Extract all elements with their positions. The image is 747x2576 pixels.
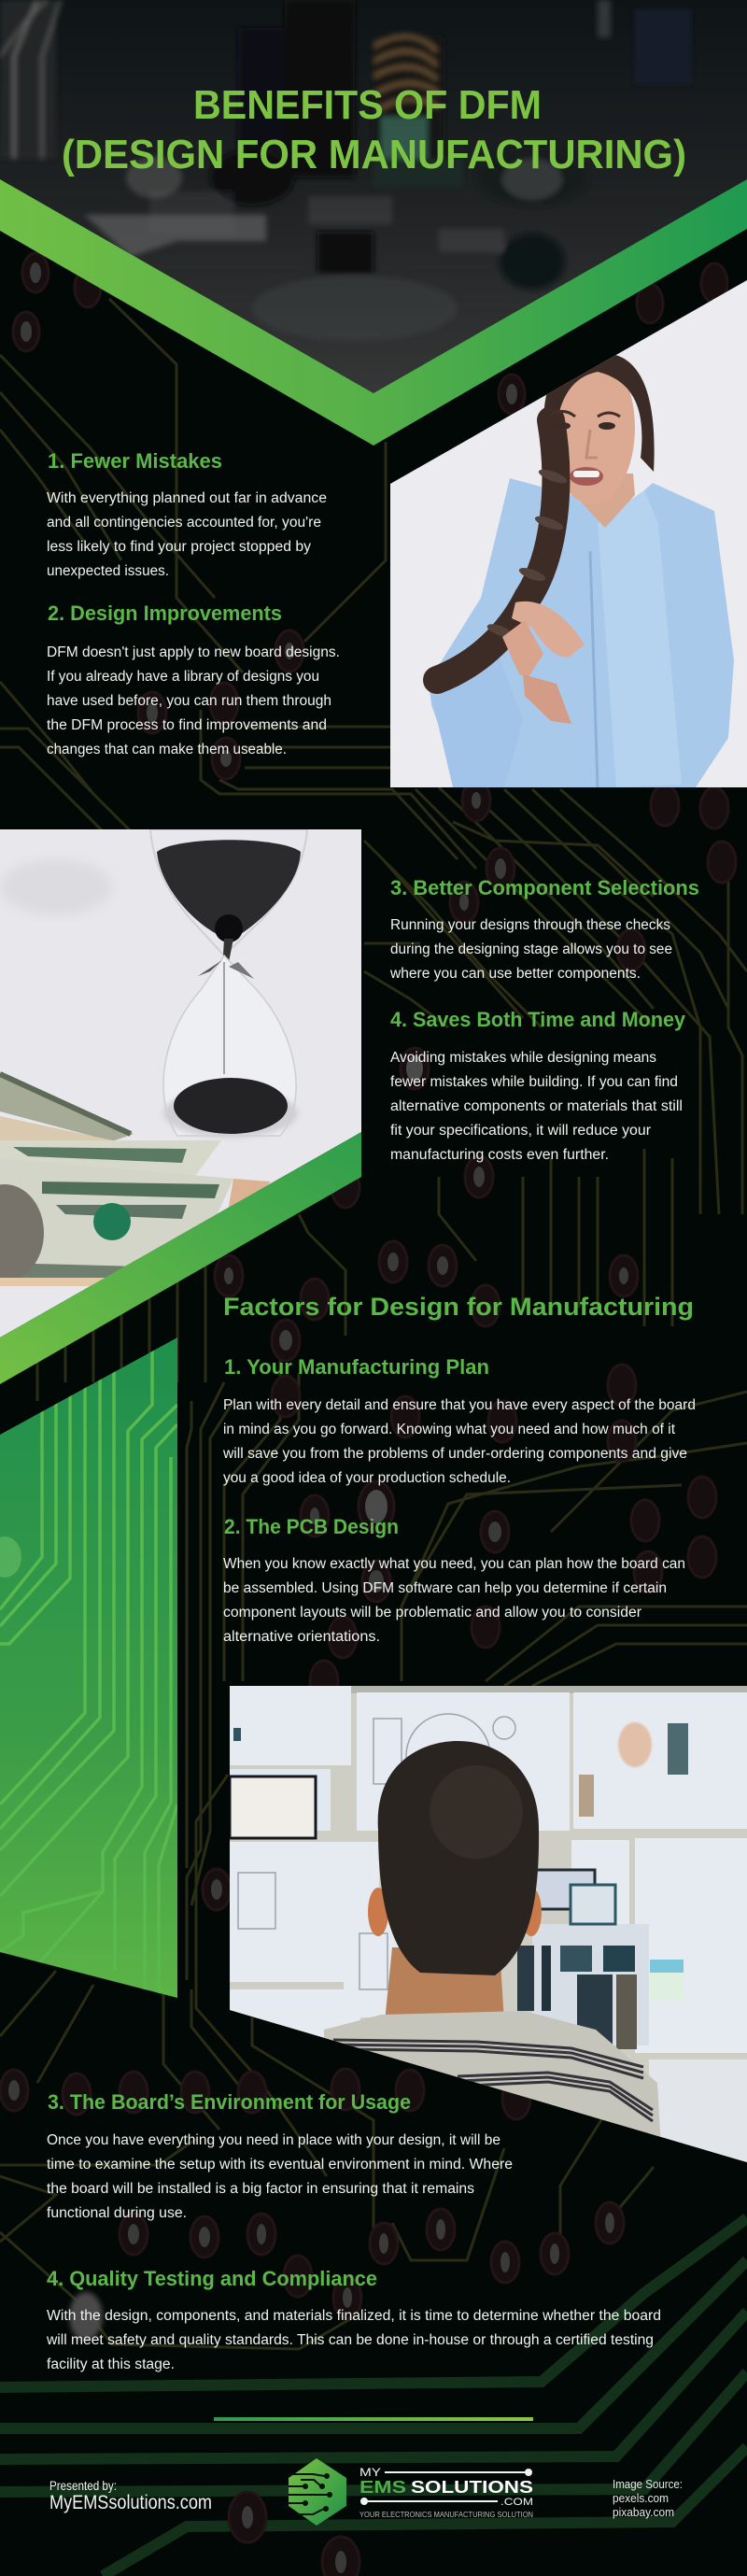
benefit 3: better component selections: where you can use better components. <box>389 966 641 982</box>
benefit 4: saves both time and money <box>390 1008 686 1163</box>
benefit 2: design improvements <box>47 602 340 757</box>
wordmark: SOLUTIONS <box>411 2478 533 2497</box>
benefit 3: better component selections: 3. Better Component Selections <box>390 876 699 899</box>
factor 4: quality testing: will meet safety and quality standards. This can be done in-house or through a certified testing <box>46 2332 654 2348</box>
image source credits: pixabay.com <box>613 2505 674 2519</box>
logo <box>289 2458 533 2526</box>
benefit 4: saves both time and money: fit your specifications, it will reduce your <box>390 1123 651 1139</box>
benefit 2: design improvements: have used before, you can run them through <box>47 693 331 709</box>
factor 3: environment: the board will be installed is a big factor in ensuring that it remains <box>47 2181 474 2197</box>
diagonal green band <box>0 1132 361 1384</box>
benefit 4: saves both time and money: manufacturing costs even further. <box>390 1147 609 1163</box>
benefit 2: design improvements: 2. Design Improvements <box>48 602 282 625</box>
factor 4: quality testing: 4. Quality Testing and Compliance <box>47 2267 377 2290</box>
factor 1: manufacturing plan: will save you from the problems of under-ordering components and give <box>222 1446 687 1462</box>
factor 1: manufacturing plan: you a good idea of your production schedule. <box>223 1470 511 1486</box>
factor 1: manufacturing plan: Plan with every detail and ensure that you have every aspect of the board <box>223 1397 696 1413</box>
benefit 1: fewer mistakes: less likely to find your project stopped by <box>47 539 311 555</box>
image source credits: Image Source: <box>613 2477 683 2491</box>
benefit 4: saves both time and money: alternative components or materials that still <box>390 1098 683 1114</box>
factor 3: environment: time to examine the setup with its eventual environment in mind. Where <box>47 2157 513 2173</box>
image source credits: pexels.com <box>613 2491 669 2505</box>
header photo: circuit board close-up <box>0 0 747 397</box>
image source credits <box>613 2477 683 2519</box>
benefit 1: fewer mistakes <box>47 449 327 579</box>
panel: green circuit panel <box>0 1336 177 1999</box>
wordmark <box>359 2466 533 2519</box>
title: BENEFITS OF DFM <box>193 82 542 128</box>
wordmark: YOUR ELECTRONICS MANUFACTURING SOLUTION <box>359 2510 533 2519</box>
footer divider <box>214 2417 533 2421</box>
factor 4: quality testing: With the design, components, and materials finalized, it is time to determine whether the board <box>47 2308 661 2324</box>
factor 4: quality testing <box>46 2267 661 2372</box>
factor 2: pcb design: be assembled. Using DFM software can help you determine if certain <box>223 1580 667 1596</box>
factor 4: quality testing: facility at this stage. <box>47 2357 175 2372</box>
photo: man viewing design wall <box>230 1686 747 2167</box>
benefit 4: saves both time and money: 4. Saves Both Time and Money <box>390 1008 686 1031</box>
factor 3: environment: functional during use. <box>47 2205 187 2221</box>
benefit 2: design improvements: DFM doesn't just apply to new board designs. <box>47 644 340 660</box>
benefit 3: better component selections: during the designing stage allows you to see <box>390 941 672 957</box>
presented by: Presented by: <box>49 2478 117 2493</box>
benefit 4: saves both time and money: Avoiding mistakes while designing means <box>390 1050 656 1066</box>
factor 1: manufacturing plan: in mind as you go forward. Knowing what you need and how much of it <box>223 1422 676 1437</box>
wordmark: .COM <box>500 2497 533 2508</box>
factor 2: pcb design <box>223 1515 685 1645</box>
factor 2: pcb design: alternative orientations. <box>223 1629 380 1645</box>
factor 1: manufacturing plan <box>222 1355 696 1486</box>
factor 2: pcb design: When you know exactly what you need, you can plan how the board can <box>223 1556 685 1572</box>
title: (DESIGN FOR MANUFACTURING) <box>62 132 686 177</box>
wordmark: MY <box>359 2466 381 2479</box>
photo: hourglass and money <box>0 829 361 1338</box>
benefit 1: fewer mistakes: and all contingencies accounted for, you're <box>47 515 321 531</box>
factor 2: pcb design: 2. The PCB Design <box>224 1515 399 1538</box>
chevron band <box>0 179 747 446</box>
photo: frustrated woman <box>390 280 747 787</box>
benefit 1: fewer mistakes: 1. Fewer Mistakes <box>48 449 222 473</box>
factor 2: pcb design: component layouts will be problematic and allow you to consider <box>223 1605 641 1621</box>
benefit 1: fewer mistakes: unexpected issues. <box>47 563 169 579</box>
section heading: factors: Factors for Design for Manufacturing <box>223 1293 694 1321</box>
wordmark: EMS <box>359 2478 406 2497</box>
benefit 1: fewer mistakes: With everything planned out far in advance <box>47 490 327 506</box>
factor 3: environment <box>47 2090 513 2221</box>
presented by: MyEMSsolutions.com <box>49 2492 212 2513</box>
factor 1: manufacturing plan: 1. Your Manufacturing Plan <box>224 1355 489 1379</box>
benefit 2: design improvements: the DFM process to find improvements and <box>47 717 327 733</box>
icon: circuit hexagon <box>289 2458 346 2526</box>
benefit 2: design improvements: If you already have a library of designs you <box>47 669 319 685</box>
benefit 3: better component selections <box>389 876 699 982</box>
benefit 4: saves both time and money: fewer mistakes while building. If you can find <box>390 1074 678 1090</box>
title <box>62 82 686 177</box>
benefit 3: better component selections: Running your designs through these checks <box>390 917 670 933</box>
factor 3: environment: Once you have everything you need in place with your design, it will be <box>47 2132 500 2148</box>
factor 3: environment: 3. The Board’s Environment for Usage <box>48 2090 411 2114</box>
presented by <box>49 2478 212 2513</box>
benefit 2: design improvements: changes that can make them useable. <box>47 742 287 757</box>
